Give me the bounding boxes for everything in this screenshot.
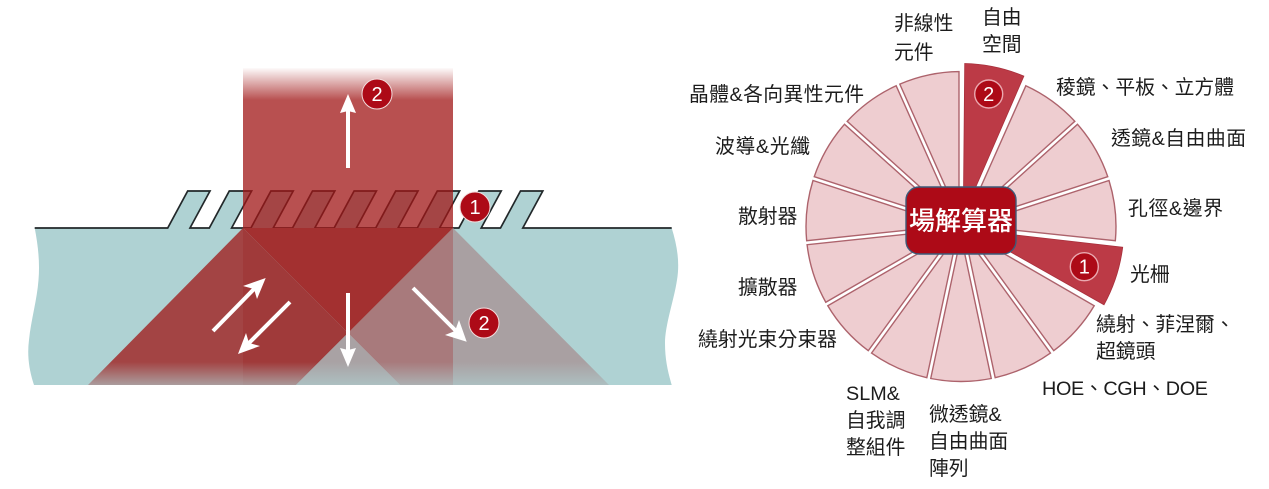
glass waveguide substrate with slanted grating: [28, 191, 678, 385]
label: scatterer: 散射器: [738, 206, 797, 228]
label: crystal and anisotropic: 晶體&各向異性元件: [689, 84, 864, 106]
label: free space: 空間: [982, 34, 1022, 56]
badge: 2 top: [362, 79, 392, 109]
diagram: grating light paths: [28, 68, 678, 385]
label: nonlinear components: 非線性: [894, 13, 953, 35]
badge: 2 top: 2: [371, 84, 383, 106]
center box: field solver: 場解算器: [909, 206, 1013, 236]
badge: 1 on segment: [1070, 253, 1098, 281]
label: grating: 光柵: [1130, 264, 1170, 286]
label: lenses: 透鏡&自由曲面: [1111, 128, 1246, 150]
badge: 1 grating: [460, 192, 490, 222]
badge: 2 right: 2: [478, 313, 490, 335]
label: diffractive beam splitter: 繞射光束分束器: [698, 329, 837, 351]
center box: field solver: [906, 187, 1016, 254]
arrow: down-right: [413, 288, 467, 342]
arrow: down-left: [238, 302, 290, 354]
badge: 2 on segment: [975, 80, 1003, 108]
segment: free space highlighted: [934, 61, 1024, 222]
beam: reflected upward: [243, 68, 453, 228]
label: HOE CGH DOE: HOE、CGH、DOE: [1042, 378, 1208, 400]
beam: transmitted lower triangle: [296, 333, 400, 385]
badge: 2 right: [469, 308, 499, 338]
beam overlap: left-going in vertical beam: [243, 228, 348, 385]
label: microlens: 自由曲面: [929, 431, 1008, 453]
label: nonlinear components: 元件: [894, 42, 934, 64]
pie chart: field solver segments: [804, 61, 1125, 381]
label: diffuser: 擴散器: [738, 277, 797, 299]
label: free space: 自由: [982, 7, 1022, 29]
label: waveguide and fiber: 波導&光纖: [715, 136, 810, 158]
beam overlap: right-going in vertical beam: [348, 228, 453, 385]
label: SLM: SLM&: [846, 383, 900, 405]
segments: light wedges: [804, 69, 1118, 381]
label: diffraction, fresnel, metalens: 超鏡頭: [1096, 341, 1156, 363]
label: aperture: 孔徑&邊界: [1128, 198, 1223, 220]
beam: totally internally reflected to the left: [88, 228, 243, 385]
arrow: up: [340, 94, 356, 168]
grating surface outline: [35, 191, 672, 228]
segment: grating highlighted: [962, 201, 1125, 306]
label: prisms: 稜鏡、平板、立方體: [1056, 77, 1234, 99]
beam: diffracted to the right: [453, 228, 609, 385]
beam fade at bottom edge: [86, 362, 611, 385]
badge: 2 on segment: 2: [983, 84, 994, 106]
labels around pie: [689, 7, 1246, 480]
label: SLM: 自我調: [846, 410, 905, 432]
badge: 1 grating: 1: [469, 197, 481, 219]
label: SLM: 整組件: [846, 437, 905, 459]
arrow: up-right: [213, 278, 266, 331]
badge: 1 on segment: 1: [1079, 257, 1090, 279]
arrow: down: [340, 293, 356, 367]
label: diffraction, fresnel, metalens: 繞射、菲涅爾、: [1096, 314, 1234, 336]
label: microlens: 微透鏡&: [929, 404, 1002, 426]
label: microlens: 陣列: [929, 458, 969, 480]
beam overlap: transmitted core: [243, 228, 453, 333]
